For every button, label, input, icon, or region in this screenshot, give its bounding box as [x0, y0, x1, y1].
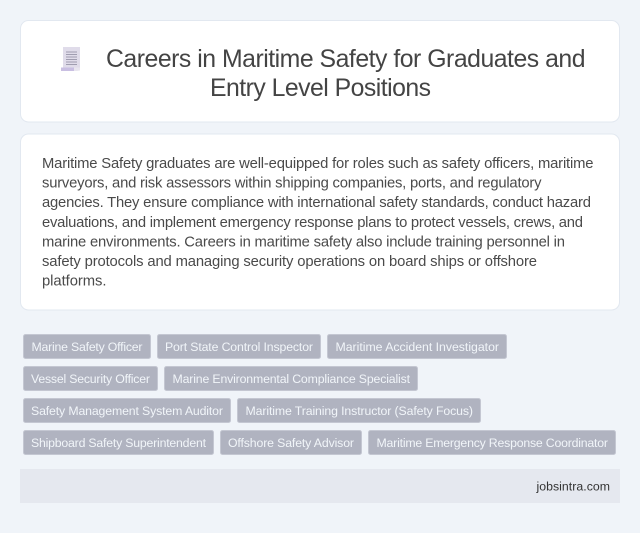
- tag: Safety Management System Auditor: Safety Management System Auditor: [31, 404, 223, 418]
- panel: description card: [20, 134, 620, 310]
- tag: Maritime Training Instructor (Safety Focus): Maritime Training Instructor (Safety Focus): [246, 404, 473, 418]
- tag: Maritime Emergency Response Coordinator: Maritime Emergency Response Coordinator: [376, 436, 608, 450]
- tag: Maritime Accident Investigator: Maritime Accident Investigator: [336, 340, 499, 354]
- tag: Shipboard Safety Superintendent: [24, 430, 214, 454]
- title heading: Entry Level Positions: [210, 75, 431, 102]
- description text: surveyors, and risk assessors within shipping companies, ports, and regulatory: [42, 176, 542, 192]
- career tags: [24, 334, 616, 454]
- tag: Marine Environmental Compliance Specialist: Marine Environmental Compliance Specialist: [172, 372, 411, 386]
- footer source text: jobsintra.com: [536, 480, 610, 494]
- tag: Marine Environmental Compliance Specialist: [164, 366, 418, 390]
- description text: Maritime Safety graduates are well-equipped for roles such as safety officers, maritime: [42, 156, 594, 172]
- title heading: [106, 46, 586, 102]
- description text: marine environments. Careers in maritime safety also include training personnel in: [42, 234, 565, 250]
- panel: title card: [20, 20, 620, 122]
- title heading: Careers in Maritime Safety for Graduates and: [106, 46, 586, 73]
- description text: [42, 156, 594, 290]
- tag: Port State Control Inspector: Port State Control Inspector: [165, 340, 313, 354]
- tag: Safety Management System Auditor: [24, 398, 230, 422]
- tag: Vessel Security Officer: [24, 366, 158, 390]
- description text: evaluations, and implement emergency response plans to protect vessels, crews, and: [42, 215, 583, 231]
- tag: Port State Control Inspector: [158, 334, 320, 358]
- icon: document scroll: [61, 47, 80, 71]
- tag: Offshore Safety Advisor: [220, 430, 362, 454]
- tag: Vessel Security Officer: Vessel Security Officer: [31, 372, 150, 386]
- tag: Marine Safety Officer: [24, 334, 150, 358]
- footer bar: [20, 469, 620, 503]
- tag: Shipboard Safety Superintendent: Shipboard Safety Superintendent: [31, 436, 207, 450]
- description text: agencies. They ensure compliance with international safety standards, conduct hazard: [42, 195, 591, 211]
- description text: platforms.: [42, 274, 106, 290]
- description text: safety protocols and managing security operations on board ships or offshore: [42, 254, 537, 270]
- tag: Maritime Accident Investigator: [328, 334, 506, 358]
- tag: Offshore Safety Advisor: Offshore Safety Advisor: [228, 436, 354, 450]
- tag: Marine Safety Officer: Marine Safety Officer: [32, 340, 142, 354]
- tag: Maritime Emergency Response Coordinator: [368, 430, 616, 454]
- tag: Maritime Training Instructor (Safety Focus): [238, 398, 480, 422]
